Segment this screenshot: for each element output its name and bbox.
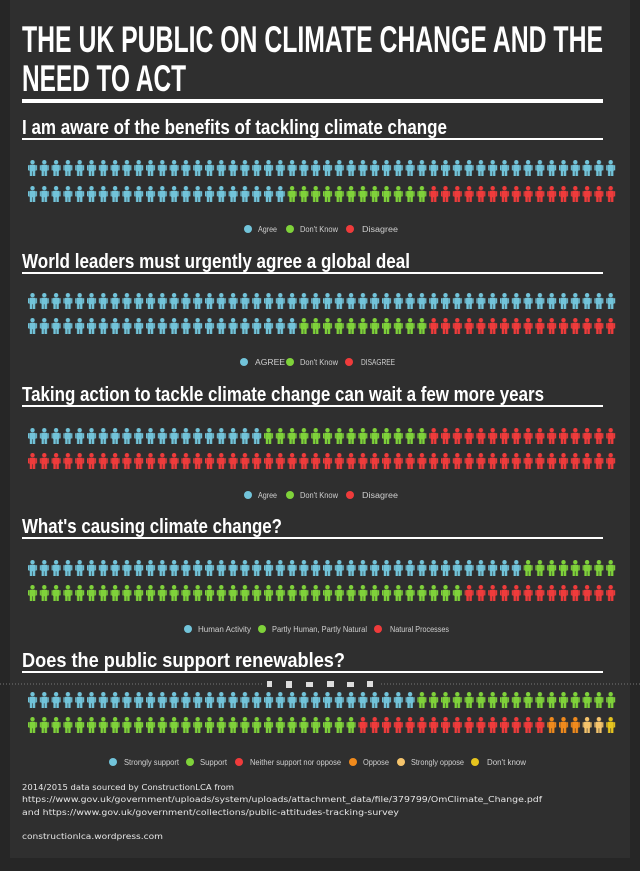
footer sources: constructionlca.wordpress.com: [22, 831, 163, 841]
footer sources: 2014/2015 data sourced by ConstructionLCA from: [22, 782, 234, 792]
legend: world leaders: [240, 358, 395, 367]
legend: aware: Disagree: [362, 225, 399, 234]
chart: world leaders: [28, 293, 618, 334]
legend: world leaders: Don't Know: [300, 358, 338, 367]
legend: aware: Don't Know: [300, 225, 338, 234]
legend: aware: [244, 225, 399, 234]
legend: can wait: Disagree: [362, 491, 399, 500]
legend: causes: Partly Human, Partly Natural: [272, 625, 367, 634]
toolbar overlay: [0, 679, 640, 689]
legend: renewables: Support: [200, 758, 228, 767]
footer sources: and https://www.gov.uk/government/collections/public-attitudes-tracking-survey: [22, 807, 399, 817]
title: [22, 19, 603, 103]
heading: causes: What's causing climate change?: [22, 516, 282, 538]
legend: causes: Natural Processes: [390, 625, 449, 634]
legend: can wait: [244, 491, 399, 500]
chart: renewables: [28, 692, 618, 733]
heading: world leaders: World leaders must urgently agree a global deal: [22, 251, 410, 273]
heading: can wait: Taking action to tackle climate change can wait a few more years: [22, 384, 544, 406]
chart: can wait: [28, 428, 618, 469]
legend: can wait: Agree: [258, 491, 277, 500]
heading: aware of benefits: I am aware of the benefits of tackling climate change: [22, 117, 447, 139]
legend: causes: [184, 625, 449, 634]
footer sources: [22, 782, 543, 841]
chart: causes: [28, 560, 618, 601]
legend: renewables: Oppose: [363, 758, 390, 767]
legend: world leaders: AGREE: [255, 358, 285, 367]
legend: causes: Human Activity: [198, 625, 251, 634]
legend: world leaders: DISAGREE: [361, 358, 395, 367]
title: NEED TO ACT: [22, 58, 186, 99]
footer sources: https://www.gov.uk/government/uploads/system/uploads/attachment_data/file/379799/OmClimate_Change.pdf: [22, 794, 543, 804]
legend: renewables: Strongly oppose: [411, 758, 464, 767]
heading: renewables: Does the public support renewables?: [22, 650, 345, 672]
legend: can wait: Don't Know: [300, 491, 338, 500]
legend: renewables: Neither support nor oppose: [250, 758, 342, 767]
legend: renewables: Strongly support: [124, 758, 180, 767]
chart: aware of benefits: [28, 160, 618, 202]
legend: renewables: Don't know: [487, 758, 526, 767]
legend: aware: Agree: [258, 225, 277, 234]
legend: renewables: [109, 758, 526, 767]
